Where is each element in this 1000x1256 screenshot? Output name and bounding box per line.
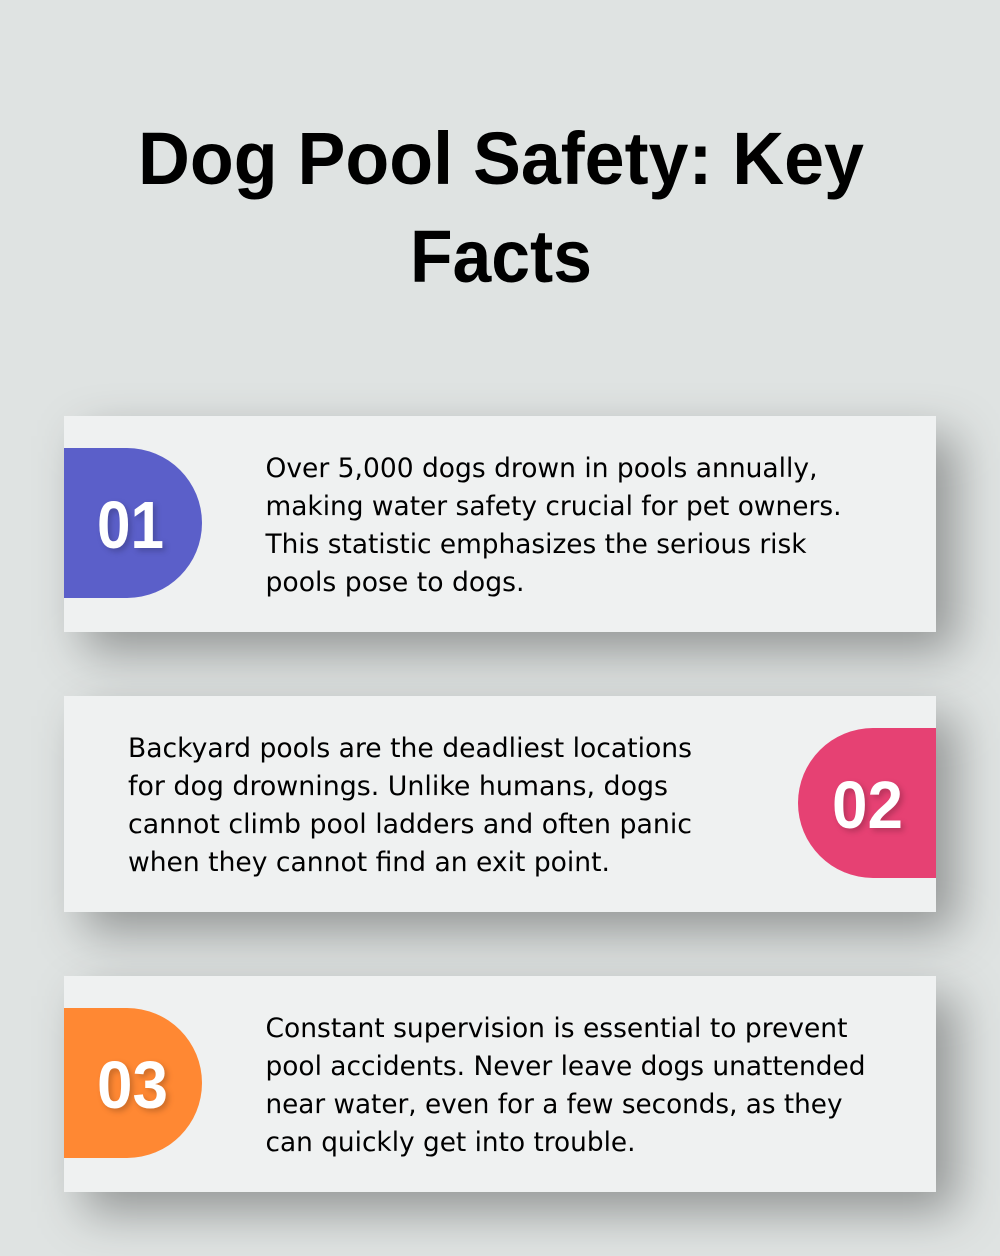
text: fact 03: can quickly get into trouble. (266, 1127, 636, 1158)
text: fact 02 (128, 733, 692, 878)
text: fact 01 (265, 453, 842, 598)
text: fact 01: pools pose to dogs. (266, 567, 524, 598)
badge: 03: 03 (97, 1048, 168, 1123)
badge: 01: 01 (97, 488, 164, 563)
text: fact 03: pool accidents. Never leave dogs unattended (266, 1051, 866, 1082)
badge: 02 (798, 728, 936, 878)
badge: 02: 02 (832, 768, 903, 843)
text: fact 03: near water, even for a few seconds, as they (266, 1089, 843, 1120)
panel: fact 02 (64, 696, 956, 932)
title: Dog Pool Safety: Key (138, 117, 864, 200)
text: fact 02: Backyard pools are the deadliest locations (128, 733, 692, 764)
text: fact 02: cannot climb pool ladders and often panic (128, 809, 692, 840)
panel: fact 01 (64, 416, 956, 652)
title: Facts (410, 215, 592, 298)
badge: 03 (64, 1008, 202, 1158)
text: fact 03 (266, 1013, 866, 1158)
text: fact 02: for dog drownings. Unlike humans, dogs (128, 771, 668, 802)
title (138, 117, 864, 298)
badge: 01 (64, 448, 202, 598)
text: fact 02: when they cannot find an exit point. (128, 847, 610, 878)
text: fact 01: Over 5,000 dogs drown in pools annually, (266, 453, 818, 484)
panel: fact 03 (64, 976, 956, 1212)
text: fact 01: This statistic emphasizes the serious risk (265, 529, 807, 560)
text: fact 03: Constant supervision is essential to prevent (266, 1013, 848, 1044)
text: fact 01: making water safety crucial for pet owners. (266, 491, 842, 522)
